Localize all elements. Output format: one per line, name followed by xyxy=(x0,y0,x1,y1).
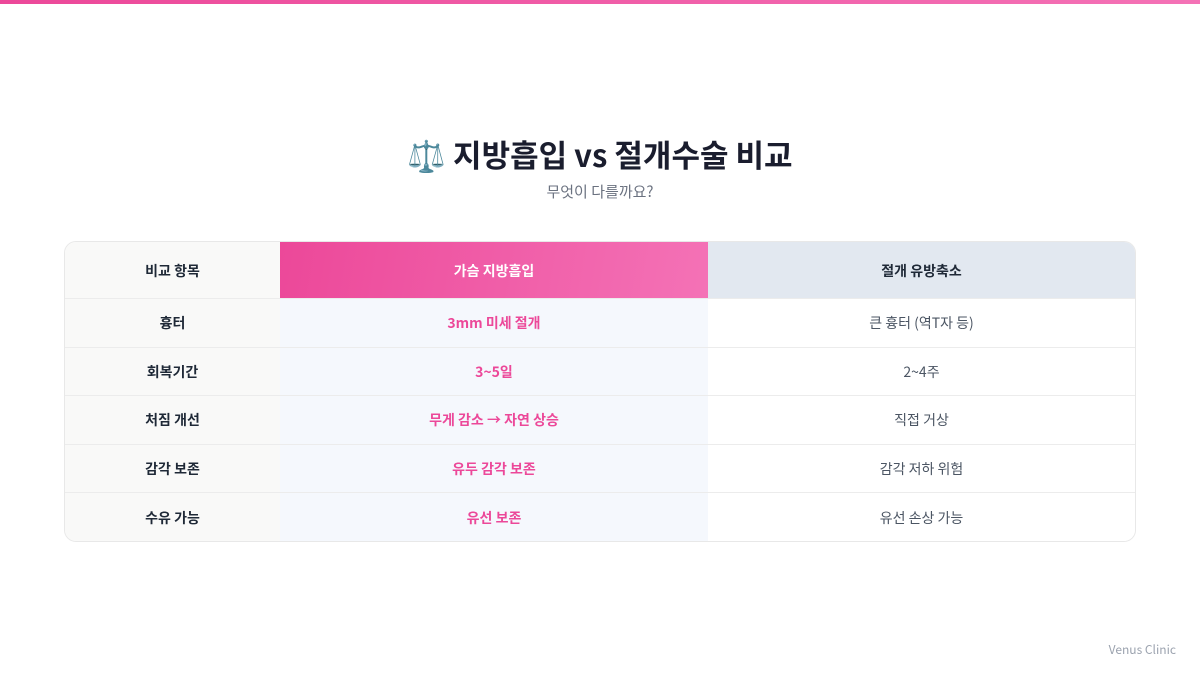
row: scar: 흉터 xyxy=(160,313,185,333)
row: breastfeeding: 유선 보존 xyxy=(467,508,521,528)
row: breastfeeding: 수유 가능 xyxy=(145,508,200,528)
title: ⚖️ 지방흡입 vs 절개수술 비교 xyxy=(407,131,793,176)
row: scar: 3mm 미세 절개 xyxy=(447,313,541,333)
row: breastfeeding: 유선 손상 가능 xyxy=(880,508,963,528)
row: sagging xyxy=(65,395,1135,444)
header row xyxy=(145,242,1135,298)
footer brand: Venus Clinic xyxy=(1109,641,1176,658)
row: sensation: 유두 감각 보존 xyxy=(452,459,536,479)
row: recovery xyxy=(65,347,1135,395)
row: sensation: 감각 저하 위험 xyxy=(880,459,963,479)
row: scar: 큰 흉터 (역T자 등) xyxy=(869,313,974,333)
row: sagging: 직접 거상 xyxy=(894,410,949,430)
row: sagging: 무게 감소 → 자연 상승 xyxy=(429,410,559,430)
row: sagging: 처짐 개선 xyxy=(145,410,200,430)
header row: 절개 유방축소 xyxy=(881,260,962,280)
subtitle: 무엇이 다를까요? xyxy=(546,181,654,202)
row: sensation xyxy=(65,444,1135,492)
row: breastfeeding xyxy=(65,492,1135,541)
header row: 가슴 지방흡입 xyxy=(454,260,534,280)
row: recovery: 2~4주 xyxy=(903,362,940,382)
header row: 비교 항목 xyxy=(145,260,200,280)
row: recovery: 3~5일 xyxy=(475,362,513,382)
row: recovery: 회복기간 xyxy=(147,362,198,382)
comparison table xyxy=(64,241,1136,542)
row: sensation: 감각 보존 xyxy=(145,459,200,479)
row: scar xyxy=(65,298,1135,347)
